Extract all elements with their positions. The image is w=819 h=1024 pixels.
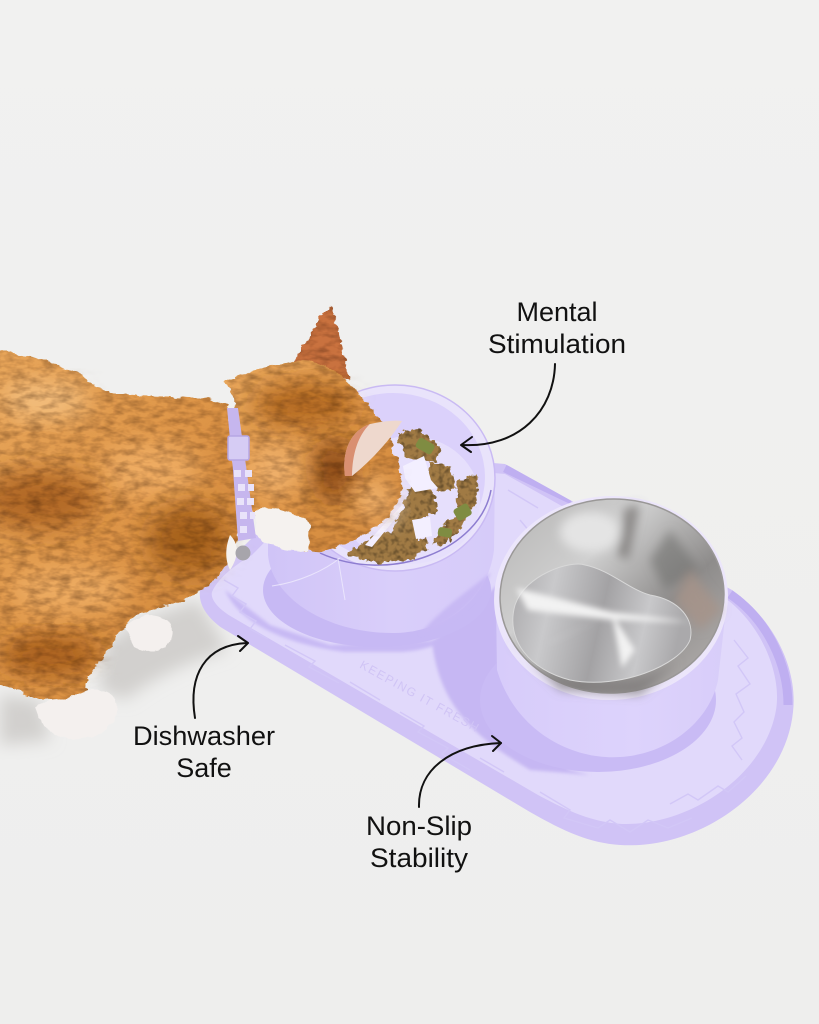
mat shadows [225,585,590,775]
placemat [200,450,794,845]
arrow: Mental Stimulation [461,364,555,452]
collar [227,408,256,541]
collar buckle [228,436,249,460]
label: Dishwasher Safe: Safe [176,753,232,783]
cat body tone patches [0,380,230,675]
steel interior [495,493,729,699]
water bowl base [480,628,716,772]
cat head [226,360,402,552]
label: Non-Slip Stability: Stability [370,843,469,873]
mat top surface [212,460,777,824]
mat zigzag tread [224,490,750,832]
bowl interior [301,393,485,561]
label: Mental Stimulation: Stimulation [488,329,626,359]
cat front ear [344,421,402,476]
collar checks [234,470,255,533]
bowl rim accent line [320,490,491,565]
collar bell [236,546,250,560]
head tone patches [247,383,397,522]
kibble clusters [345,428,478,563]
label: Non-Slip Stability [366,811,472,873]
label: Mental Stimulation [488,297,626,359]
water bowl body [496,600,727,757]
water bowl rim [489,490,733,706]
cat floor shadow [0,600,228,745]
bowl body [268,470,495,633]
cat back ear [292,306,350,380]
label: Non-Slip Stability: Non-Slip [366,811,472,841]
bowl outer rim [295,385,495,571]
inner ear edge [344,424,370,476]
water bowl disc [513,564,691,682]
mat embossed text: KEEPING IT FRESH [357,658,482,735]
bowl inner plate [340,436,480,564]
water bowl [480,490,733,772]
cat body [0,350,240,699]
label: Dishwasher Safe: Dishwasher [133,721,275,751]
cat white chest [255,508,310,552]
label: Mental Stimulation: Mental [516,297,598,327]
cat fur [0,306,402,699]
white neck tuft [226,535,237,570]
green kibble [415,437,473,538]
bowl inner ridges [365,456,438,547]
cat paws [35,615,172,739]
arrow: Non-Slip Stability [419,736,501,807]
label: Dishwasher Safe [133,721,275,783]
bowl base ring [263,533,491,647]
arrow: Dishwasher Safe [193,636,248,718]
cat [0,306,402,739]
bowl side shadow [420,572,491,634]
mat upper rim band [505,468,788,705]
disc highlights [516,588,690,668]
whiskers [272,558,345,600]
food bowl [263,385,495,647]
steel reflections [510,505,722,695]
